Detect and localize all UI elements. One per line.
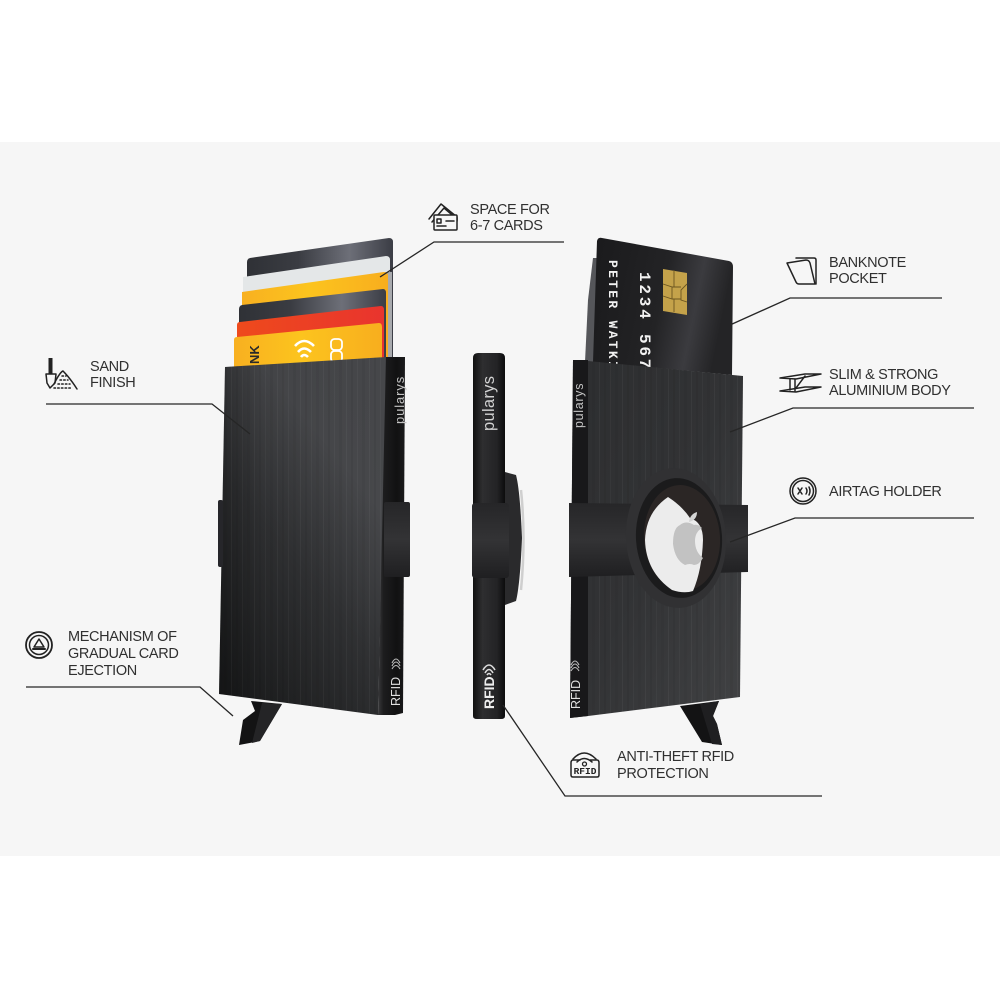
callout: ejection mechanism (26, 629, 233, 716)
leader line (730, 298, 942, 325)
callout: sand finish (46, 358, 250, 434)
airtag white face (645, 497, 703, 592)
text: GRADUAL CARD (68, 646, 178, 662)
brand text: pularys (480, 376, 498, 431)
text: BANKNOTE (829, 255, 907, 271)
side RFID mark (389, 659, 403, 706)
text: SLIM & STRONG (829, 367, 938, 383)
side brand text: pularys (392, 376, 407, 424)
left bump of slider (218, 500, 223, 567)
icon: RFID (571, 753, 599, 777)
RFID mark (569, 661, 583, 709)
airtag dark disc (640, 482, 724, 594)
black card (593, 238, 733, 375)
kickstand (239, 701, 282, 745)
leader line (46, 404, 250, 434)
chip (663, 269, 687, 315)
text: PROTECTION (617, 766, 709, 782)
cards fanned out: NK (247, 345, 262, 364)
icon: I-beam (780, 374, 821, 392)
side RFID mark: RFID (389, 677, 403, 706)
wallet: front view with cards (218, 238, 410, 745)
callout: slim and strong body (730, 367, 974, 432)
callout: anti-theft RFID (503, 705, 822, 796)
stacked cards behind (585, 258, 598, 362)
text: ANTI-THEFT RFID (617, 749, 734, 765)
background panel (0, 142, 1000, 856)
wallet body (219, 357, 387, 715)
text: FINISH (90, 375, 135, 391)
leader line (380, 242, 564, 277)
callout: airtag holder (730, 478, 974, 542)
icon: sand and shovel (46, 358, 77, 389)
airtag ring profile (505, 472, 522, 605)
icon: RFID: RFID (574, 766, 597, 777)
icon: mechanism (26, 632, 52, 658)
cards fanned out (234, 238, 393, 375)
wallet: side view (472, 353, 524, 719)
slider band (569, 503, 748, 577)
callout: space for cards (380, 202, 564, 277)
bar (473, 353, 505, 719)
text: MECHANISM OF (68, 629, 177, 645)
text: POCKET (829, 271, 887, 287)
icon: pocket (787, 258, 816, 284)
brand text: pularys (572, 383, 586, 428)
apple logo (673, 512, 703, 565)
cardholder name: PETER WATKINS (605, 260, 620, 391)
text: ALUMINIUM BODY (829, 383, 951, 399)
wallet body (570, 360, 743, 718)
card number: 1234 5678 (635, 272, 653, 384)
RFID mark: RFID (569, 680, 583, 709)
slider band (384, 502, 410, 577)
airtag edge (521, 490, 524, 590)
icon: airtag (790, 478, 816, 504)
airtag holder ring (621, 465, 731, 611)
text: SAND (90, 359, 129, 375)
leader line (730, 408, 974, 432)
text: AIRTAG HOLDER (829, 484, 942, 500)
leader line (730, 518, 974, 542)
text: 6-7 CARDS (470, 218, 543, 234)
icon: cards (429, 204, 457, 230)
slider band (472, 503, 509, 578)
kickstand (680, 701, 722, 745)
wallet: back view with airtag (569, 238, 748, 745)
callout: banknote pocket (730, 255, 942, 325)
leader line (26, 687, 233, 716)
text: EJECTION (68, 663, 137, 679)
RFID mark: RFID (481, 676, 497, 709)
leader line (503, 705, 822, 796)
text: SPACE FOR (470, 202, 550, 218)
inner ring (632, 475, 726, 601)
